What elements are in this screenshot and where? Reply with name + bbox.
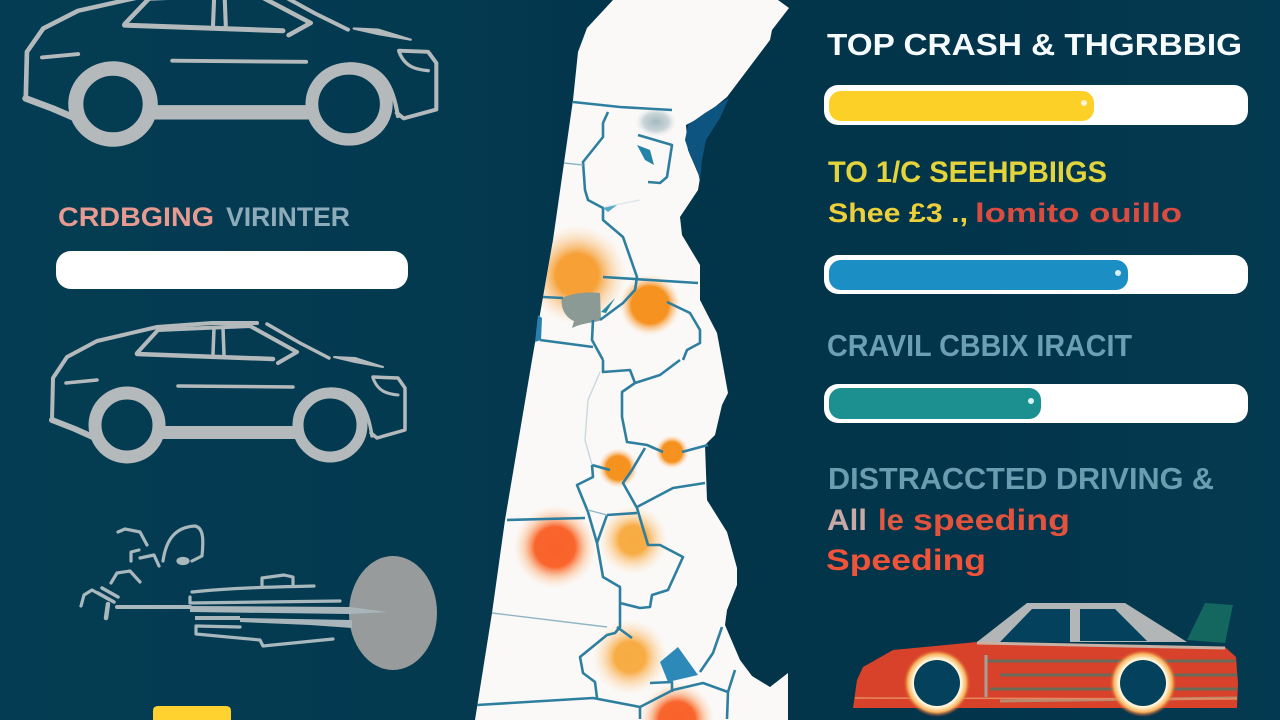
heading: left label — [58, 202, 350, 232]
roof — [977, 603, 1187, 642]
faint borders — [492, 163, 640, 627]
icon: outline car top — [26, 0, 436, 140]
heading: top crash: TOP CRASH & THGRBBIG — [827, 27, 1242, 62]
yellow tab — [153, 706, 231, 720]
text: all le speeding: speeding — [913, 504, 1070, 537]
icon: red speeding car — [853, 603, 1238, 717]
map: regional crash hot spots — [475, 0, 789, 720]
text: speeding: Speeding — [826, 544, 986, 577]
county borders — [477, 102, 735, 719]
spoiler — [1187, 603, 1233, 643]
grey cloud — [349, 556, 437, 670]
text: yellow and red line: Shee £3 ., — [828, 198, 968, 228]
hot spots clipped to map — [513, 107, 715, 720]
body stripes — [855, 655, 1237, 701]
coast water — [685, 98, 729, 182]
heading: distracted driving: DISTRACCTED DRIVING & — [828, 461, 1214, 496]
text: yellow and red line: lomito ouillo — [975, 198, 1182, 228]
progress bar: yellow — [824, 85, 1248, 125]
heading: left label: VIRINTER — [226, 202, 350, 232]
wheels — [914, 660, 960, 706]
icon: speeding lines and grey cloud — [52, 526, 437, 670]
text: all le speeding: le — [878, 504, 904, 537]
heading: blue grey subheading: CRAVIL CBBIX IRACIT — [827, 328, 1132, 363]
heading: left label: CRDBGING — [58, 202, 214, 232]
progress bar: teal — [824, 384, 1248, 423]
map shape — [475, 0, 789, 720]
windows — [1000, 609, 1147, 642]
heading: yellow subheading: TO 1/C SEEHPBIIGS — [828, 156, 1107, 189]
progress bar: blue — [824, 255, 1248, 294]
text: all le speeding: All — [827, 504, 867, 537]
body — [853, 642, 1238, 708]
grey region — [562, 293, 601, 328]
text: yellow and red line — [828, 198, 1182, 228]
icon: outline car middle — [52, 323, 405, 457]
blue markers — [637, 145, 654, 165]
text: all le speeding — [827, 504, 1070, 537]
wheel glow — [903, 649, 971, 717]
bar: left white bar — [56, 251, 408, 289]
